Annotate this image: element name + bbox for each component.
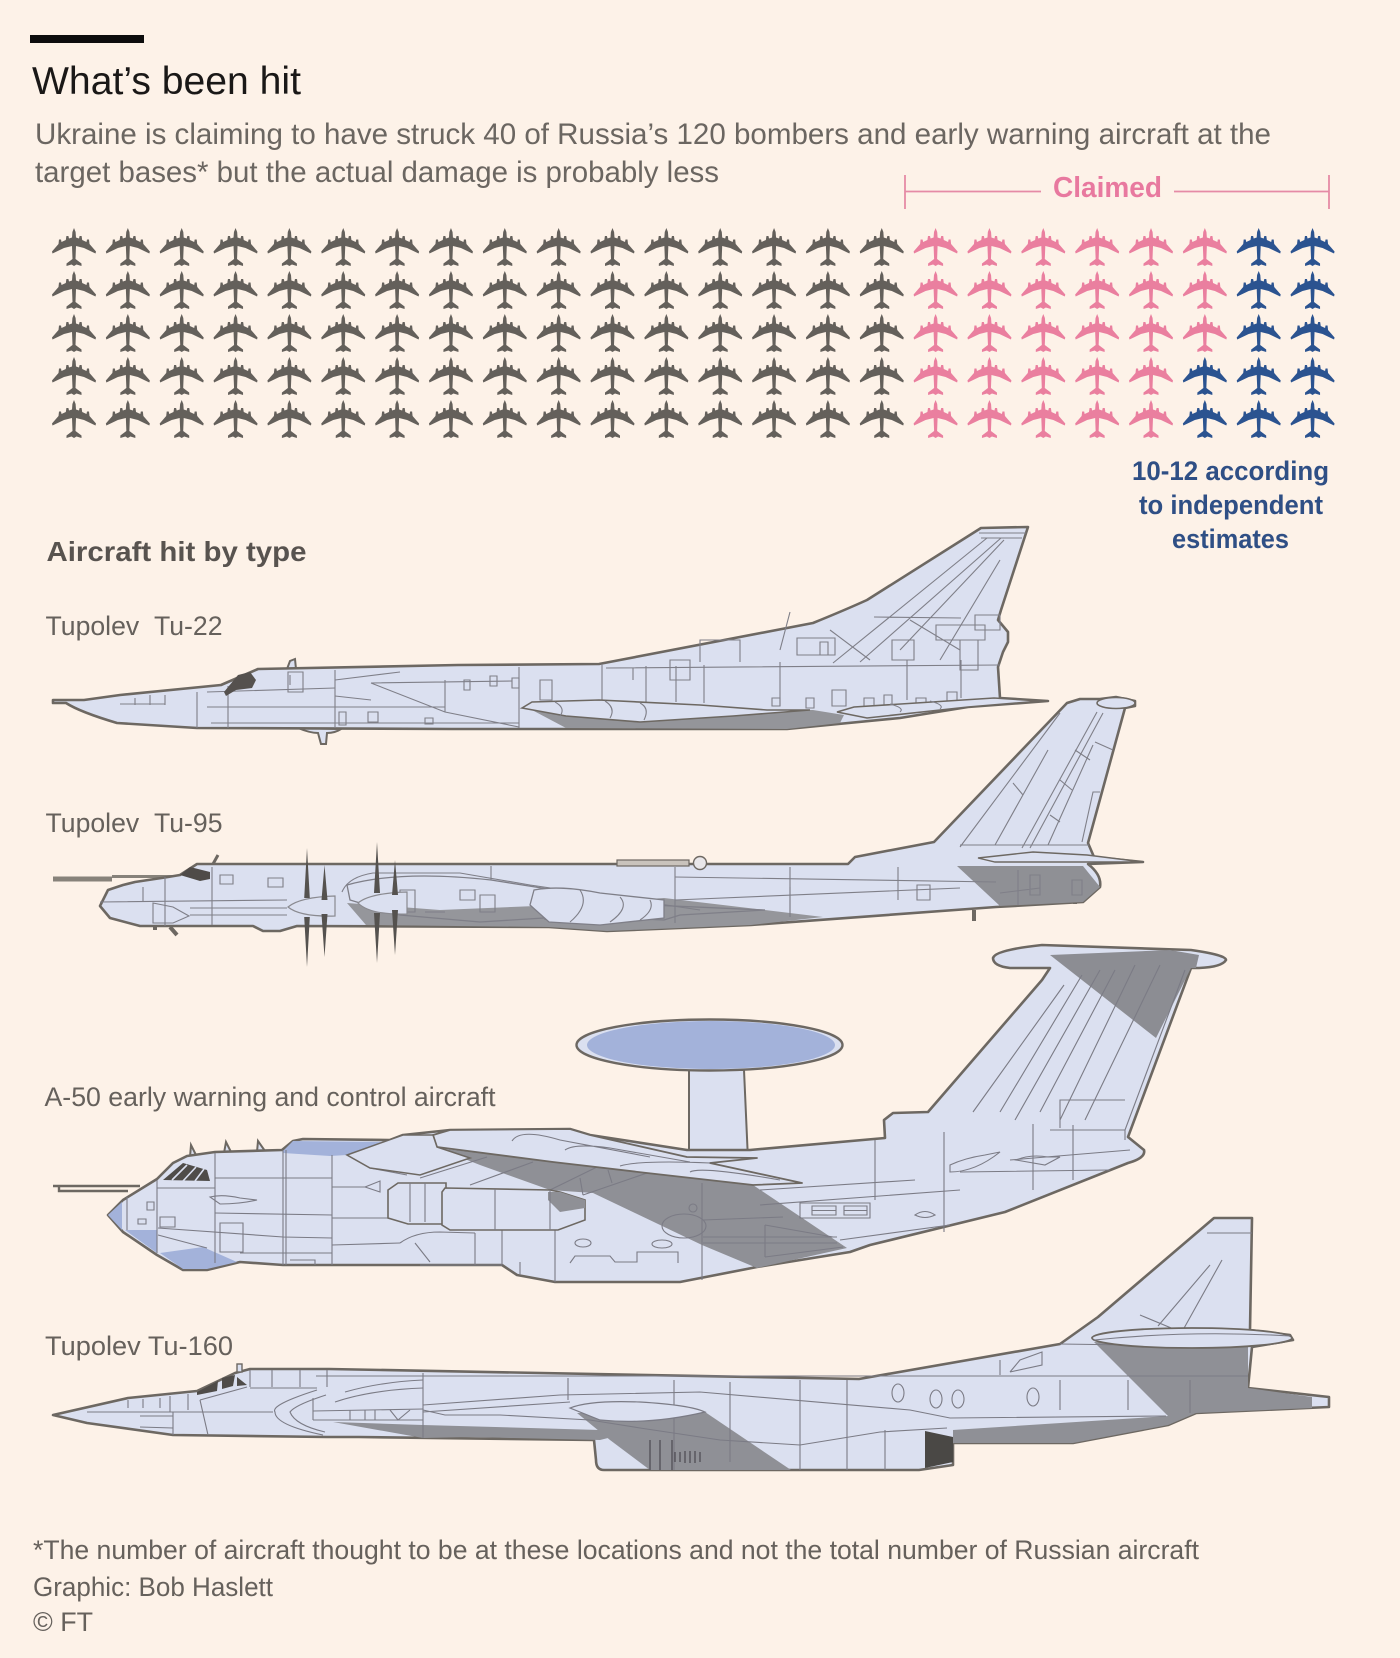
wing panel lines	[512, 1134, 780, 1180]
fuselage outline	[53, 527, 1048, 729]
wing	[433, 1129, 802, 1185]
refuelling probe	[53, 1186, 140, 1191]
radome pylon	[689, 1070, 748, 1160]
rear engine	[388, 1183, 446, 1224]
pictogram: 12 blue independently estimated aircraft	[1183, 228, 1335, 438]
top rule	[30, 35, 144, 43]
subtitle: target bases* but the actual damage is probably less	[35, 156, 719, 189]
independent estimates annotation	[1132, 456, 1329, 554]
aircraft drawing: Tu-160	[53, 1218, 1329, 1470]
label: Tu-160: Tupolev Tu-160	[45, 1331, 233, 1361]
footnote and credits: Graphic: Bob Haslett	[33, 1572, 273, 1602]
footnote and credits	[33, 1535, 1199, 1637]
label: A-50: A-50 early warning and control aircraft	[44, 1082, 496, 1112]
blue windows	[108, 1141, 383, 1269]
fin cap	[1097, 698, 1135, 708]
footnote and credits: *The number of aircraft thought to be at these locations and not the total number of Russian aircraft	[33, 1535, 1199, 1565]
rear damage shade	[953, 1342, 1312, 1443]
horizontal stabiliser	[1092, 1328, 1292, 1348]
nacelle exhaust	[925, 1431, 953, 1468]
tailplane	[978, 852, 1143, 862]
propeller blades	[304, 842, 398, 967]
nacelle band damage shade	[577, 1412, 791, 1470]
panel lines	[87, 1233, 1252, 1470]
claimed label: Claimed	[1053, 172, 1162, 204]
cockpit windows	[163, 1163, 210, 1181]
engine nacelles and wing	[347, 876, 765, 922]
dorsal strip and blister	[617, 860, 689, 866]
footnote and credits: © FT	[33, 1607, 93, 1637]
independent estimates annotation: to independent	[1139, 490, 1323, 520]
radome	[576, 1020, 842, 1070]
subtitle	[35, 118, 1271, 189]
damage shade	[532, 710, 844, 729]
damage shade	[957, 866, 1100, 906]
engine nacelle and wing	[522, 700, 810, 722]
front engine	[442, 1188, 585, 1230]
tail damage shade	[1050, 950, 1199, 1038]
refuelling probe	[53, 876, 112, 882]
claimed bracket	[905, 172, 1329, 209]
cockpit	[224, 672, 256, 696]
independent estimates annotation: 10-12 according	[1132, 456, 1329, 486]
propeller hubs	[288, 892, 407, 916]
panel lines	[127, 965, 1185, 1282]
pictogram: 80 grey aircraft	[52, 228, 904, 438]
nacelle details	[650, 1440, 672, 1470]
aircraft drawing: Tu-22	[53, 527, 1048, 744]
cockpit	[180, 867, 210, 881]
label: Tu-95: Tupolev Tu-95	[46, 808, 222, 838]
section heading: Aircraft hit by type	[46, 536, 306, 567]
fuselage outline	[100, 697, 1143, 931]
label: Tu-22: Tupolev Tu-22	[46, 611, 222, 641]
aircraft drawing: A-50	[53, 945, 1226, 1282]
wing glove	[570, 1402, 705, 1421]
cockpit	[197, 1375, 247, 1395]
fuselage and tail outline	[53, 1218, 1329, 1470]
fuselage damage shade	[437, 1148, 847, 1268]
subtitle: Ukraine is claiming to have struck 40 of Russia’s 120 bombers and early warning aircraft at the	[35, 118, 1271, 151]
panel lines	[120, 533, 1026, 728]
dark underside shade	[333, 1422, 620, 1440]
title: What’s been hit	[32, 60, 301, 103]
independent estimates annotation: estimates	[1172, 524, 1289, 554]
fuselage and tail outline	[108, 945, 1226, 1282]
panel lines	[100, 712, 1113, 926]
wing root fairing	[347, 1135, 470, 1175]
pictogram: 28 pink claimed aircraft	[914, 228, 1227, 438]
antennas	[190, 1141, 265, 1157]
aircraft drawing: Tu-95	[53, 697, 1143, 967]
